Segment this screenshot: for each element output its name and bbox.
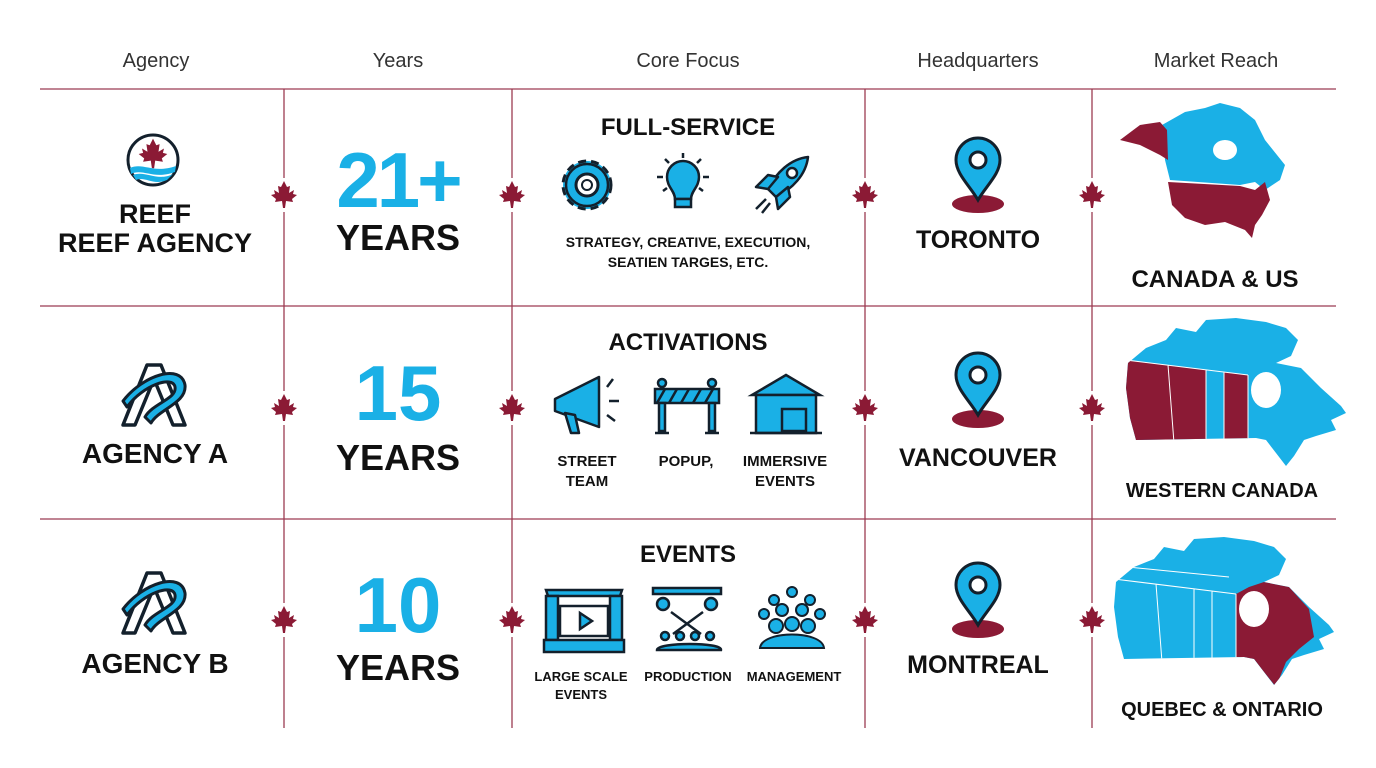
icon: barrier <box>655 379 719 433</box>
row 3: Agency B <box>81 537 1334 721</box>
headquarters: montreal <box>907 563 1049 679</box>
header row <box>123 50 1278 72</box>
core focus: events: PRODUCTION <box>644 669 732 684</box>
core focus: activations: POPUP, <box>659 453 713 470</box>
icon: gear <box>563 161 611 209</box>
headquarters: vancouver <box>899 353 1057 472</box>
market: western canada map <box>1126 318 1346 502</box>
agency name: REEF <box>119 199 191 229</box>
header row: Headquarters <box>917 50 1039 72</box>
years: YEARS <box>336 217 460 258</box>
headquarters: montreal: MONTREAL <box>907 651 1049 679</box>
years <box>336 561 460 688</box>
logo: reef <box>128 135 178 185</box>
market: canada & us map <box>1120 103 1299 293</box>
market: western canada map: WESTERN CANADA <box>1126 480 1318 502</box>
agency name <box>58 199 252 258</box>
icon: bulb <box>657 153 709 207</box>
icon: production lights <box>653 588 721 650</box>
header row: Core Focus <box>636 50 740 72</box>
years: 10 <box>355 561 441 649</box>
market: quebec & ontario map <box>1114 537 1334 721</box>
headquarters: toronto <box>916 138 1040 254</box>
core focus: events: EVENTS <box>555 687 607 702</box>
core focus: events: LARGE SCALE <box>534 669 628 684</box>
header row: Years <box>373 50 423 72</box>
years: 21+ <box>336 136 460 224</box>
core focus: activations: EVENTS <box>755 473 815 490</box>
core focus: events <box>534 541 841 702</box>
agency name: AGENCY B <box>81 648 229 679</box>
maple leaf dividers <box>268 178 1108 637</box>
icon: megaphone <box>555 377 619 433</box>
core focus: events: MANAGEMENT <box>747 669 841 684</box>
agency name: REEF AGENCY <box>58 228 252 258</box>
core focus: activations <box>555 329 827 490</box>
market: quebec & ontario map: QUEBEC & ONTARIO <box>1121 699 1323 721</box>
headquarters: toronto: TORONTO <box>916 226 1040 254</box>
grid lines <box>40 89 1336 728</box>
core focus: activations: STREET <box>557 453 617 470</box>
logo: A <box>123 573 185 633</box>
years: YEARS <box>336 647 460 688</box>
core focus: activations: TEAM <box>566 473 608 490</box>
years <box>336 349 460 478</box>
headquarters: vancouver: VANCOUVER <box>899 444 1057 472</box>
core focus: full-service: STRATEGY, CREATIVE, EXECUTION, <box>566 234 810 250</box>
core focus: activations: ACTIVATIONS <box>608 329 768 356</box>
header row: Agency <box>123 50 189 72</box>
icon: tent <box>750 375 822 433</box>
core focus: full-service: SEATIEN TARGES, ETC. <box>608 254 768 270</box>
row 2: Agency A <box>82 318 1346 502</box>
core focus: activations: IMMERSIVE <box>743 453 827 470</box>
years: 15 <box>355 349 441 437</box>
market: canada & us map: CANADA & US <box>1131 266 1299 293</box>
header row: Market Reach <box>1154 50 1278 72</box>
core focus: events: EVENTS <box>640 541 736 568</box>
row 1: Reef Agency <box>58 103 1299 293</box>
icon: people management <box>759 587 825 648</box>
logo: A <box>123 365 185 425</box>
icon: stage <box>544 590 624 652</box>
core focus: full-service <box>563 114 810 270</box>
agency name: AGENCY A <box>82 438 228 469</box>
core focus: full-service: FULL-SERVICE <box>601 114 775 141</box>
icon: rocket <box>756 157 808 213</box>
years: YEARS <box>336 437 460 478</box>
